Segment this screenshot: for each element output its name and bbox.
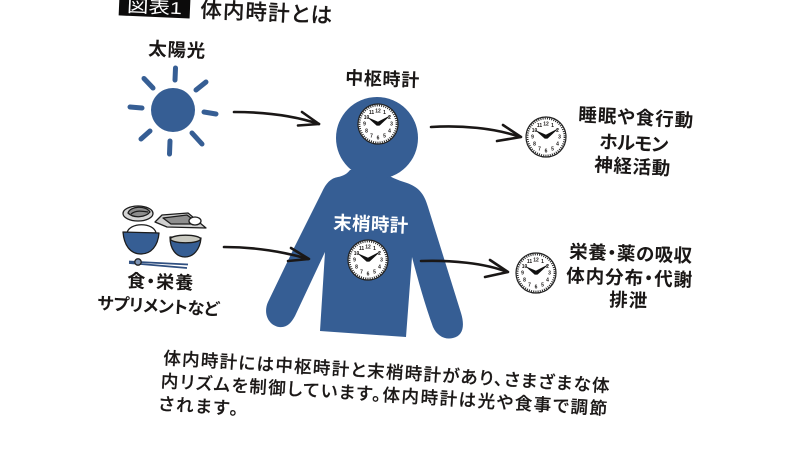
description text: されます。 xyxy=(158,394,239,419)
clock: central (head): 5 xyxy=(383,134,386,140)
chopsticks xyxy=(129,259,188,268)
person figure xyxy=(266,97,463,339)
clock: peripheral (torso): 10 xyxy=(354,251,359,257)
text: sleep, hormones, nerves: 神経活動 xyxy=(594,154,671,179)
title xyxy=(119,0,333,28)
description text: 内リズムを制御しています。体内時計は光や食事で調節 xyxy=(160,371,608,419)
sunlight label: 太陽光 xyxy=(148,38,206,61)
clock: peripheral (torso) xyxy=(348,240,388,280)
supplements label: サプリメントなど xyxy=(97,294,221,319)
clock: lower right: 8 xyxy=(523,278,526,284)
clock: peripheral (torso): 5 xyxy=(373,270,376,276)
clock: upper right: 2 xyxy=(556,128,559,134)
clock: peripheral (torso): 4 xyxy=(378,265,381,271)
text: sleep, hormones, nerves: 睡眠や食行動 xyxy=(578,104,694,131)
clock: upper right: 8 xyxy=(533,142,536,148)
clock: peripheral (torso): 12 xyxy=(365,244,371,250)
rectangular dish xyxy=(155,213,206,228)
body xyxy=(266,170,463,339)
clock: central (head): 3 xyxy=(390,122,393,128)
arrow: central clock to organs xyxy=(431,125,521,141)
clock: lower right: 6 xyxy=(535,284,538,290)
head xyxy=(336,97,418,179)
clock: peripheral (torso): 7 xyxy=(360,270,363,276)
clock: upper right: 12 xyxy=(543,122,549,128)
food and nutrition group xyxy=(97,206,221,319)
clock: central (head): 6 xyxy=(377,136,380,142)
clock: peripheral (torso): 6 xyxy=(367,272,370,278)
clock: lower right: 12 xyxy=(533,258,539,264)
clock: peripheral (torso): 11 xyxy=(359,246,364,252)
clock: central (head): 8 xyxy=(365,129,368,135)
clock: upper right: 3 xyxy=(558,135,561,141)
figure label badge xyxy=(119,0,191,19)
clock: central (head): 11 xyxy=(369,110,374,116)
clock: upper right: 1 xyxy=(551,123,554,129)
clock: upper right xyxy=(526,117,566,157)
soup bowl xyxy=(170,235,201,257)
clock: upper right: 5 xyxy=(551,146,554,152)
clock: central (head): 4 xyxy=(388,129,391,135)
peripheral clock label: 末梢時計 xyxy=(333,212,409,236)
clock: lower right: 1 xyxy=(541,259,544,265)
text: sleep, hormones, nerves xyxy=(578,104,694,179)
clock: lower right: 3 xyxy=(548,271,551,277)
clock: lower right: 4 xyxy=(546,278,549,284)
text: absorption, distribution, excretion: 排泄 xyxy=(609,289,648,311)
clock: peripheral (torso): 2 xyxy=(378,251,381,257)
clock: central (head) xyxy=(358,104,398,144)
arrow: food to body xyxy=(224,247,309,261)
clock: upper right: 10 xyxy=(532,128,537,134)
clock: lower right: 2 xyxy=(546,264,549,270)
clock: lower right: 7 xyxy=(528,282,531,288)
central clock label: 中枢時計 xyxy=(345,68,420,91)
rice bowl xyxy=(123,225,159,254)
clock: peripheral (torso): 1 xyxy=(373,246,376,252)
clock: upper right: 4 xyxy=(556,142,559,148)
icon: meal set xyxy=(123,206,206,268)
clock: peripheral (torso): 3 xyxy=(380,258,383,264)
clock: lower right: 5 xyxy=(541,282,544,288)
clock: lower right xyxy=(516,253,556,293)
fish plate xyxy=(123,206,153,221)
clock: lower right: 10 xyxy=(522,264,527,270)
food label: 食・栄養 xyxy=(127,270,194,293)
description text: 体内時計には中枢時計と末梢時計があり、さまざまな体 xyxy=(163,348,611,396)
text: absorption, distribution, excretion xyxy=(566,241,693,311)
clock: central (head): 12 xyxy=(375,108,381,114)
clock: peripheral (torso): 9 xyxy=(353,258,356,264)
clock: upper right: 6 xyxy=(545,148,548,154)
arrow: peripheral clock to organs xyxy=(421,260,508,277)
clock: central (head): 7 xyxy=(370,134,373,140)
clock: lower right: 11 xyxy=(527,259,532,265)
icon: sun xyxy=(130,68,216,154)
clock: peripheral (torso): 8 xyxy=(355,265,358,271)
text: absorption, distribution, excretion: 体内分布・代謝 xyxy=(566,265,693,290)
text: absorption, distribution, excretion: 栄養・薬の吸収 xyxy=(569,241,693,266)
arrow: sunlight to central clock xyxy=(234,112,319,126)
clock: central (head): 9 xyxy=(363,122,366,128)
clock: upper right: 11 xyxy=(537,123,542,129)
clock: central (head): 1 xyxy=(383,110,386,116)
clock: upper right: 7 xyxy=(538,146,541,152)
sunlight group xyxy=(130,38,216,154)
clock: central (head): 2 xyxy=(388,115,391,121)
clock: lower right: 9 xyxy=(521,271,524,277)
description text xyxy=(158,348,611,442)
text: sleep, hormones, nerves: ホルモン xyxy=(599,131,669,156)
clock: upper right: 9 xyxy=(531,135,534,141)
clock: central (head): 10 xyxy=(364,115,369,121)
